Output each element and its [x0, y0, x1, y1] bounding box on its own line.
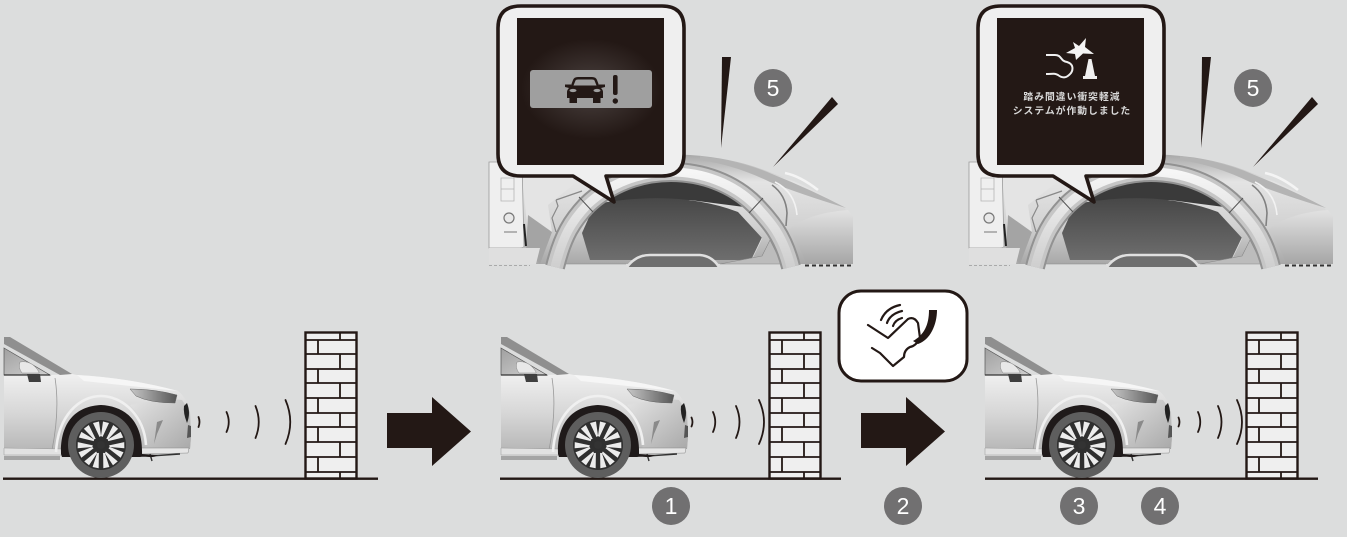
icon: traffic cone	[1083, 59, 1097, 79]
car 2	[501, 337, 688, 478]
ground line 2	[500, 478, 841, 480]
number badge 2	[884, 487, 922, 525]
number badge 3	[1060, 487, 1098, 525]
arrow: step 2 to 3	[861, 397, 945, 466]
scene 3: car braking near wall	[985, 332, 1318, 480]
brick wall 3	[1246, 332, 1298, 478]
number badge 4: 4	[1154, 493, 1167, 519]
icon: foot contour	[1046, 55, 1072, 77]
sensor waves 2	[692, 400, 764, 444]
icon: foot	[868, 318, 920, 366]
icon: vibration waves	[881, 305, 902, 326]
display screen 2	[997, 18, 1144, 165]
icon: car front	[565, 77, 605, 103]
number badge 5 right: 5	[1247, 75, 1259, 101]
dashboard 1 with warning buzzer lines	[489, 57, 853, 267]
scene 2: car with sensor detecting wall	[500, 332, 841, 480]
number badge 3: 3	[1073, 493, 1085, 519]
sensor waves 1	[198, 400, 290, 444]
car 3	[985, 337, 1172, 478]
number badge 1	[652, 487, 690, 525]
display message: 踏み間違い衝突軽減	[1023, 90, 1121, 103]
ground line 1	[3, 478, 378, 480]
brick wall 2	[769, 332, 821, 478]
display message: システムが作動しました	[1013, 104, 1131, 117]
dashboard 2 with warning buzzer lines	[969, 57, 1333, 267]
car 1	[4, 337, 191, 478]
ground line 3	[985, 478, 1318, 480]
display screen 1	[517, 18, 664, 165]
number badge 1: 1	[665, 493, 677, 519]
warning bar	[530, 70, 652, 108]
icon: pedal	[913, 310, 937, 344]
number badge 5 left	[754, 69, 792, 107]
icon: exclamation	[613, 75, 618, 104]
number badge 5 right	[1234, 69, 1272, 107]
pedal icon panel	[839, 291, 967, 381]
number badge 4	[1141, 487, 1179, 525]
number badge 5 left: 5	[767, 75, 779, 101]
speech bubble 2: system activated display	[978, 6, 1164, 202]
arrow: step 1 to 2	[387, 397, 471, 466]
icon: collision star	[1066, 38, 1094, 60]
display message	[1013, 90, 1131, 117]
number badge 2: 2	[897, 493, 909, 519]
sensor waves 3	[1178, 400, 1242, 444]
scene 1: car approaching wall with sensor waves	[3, 332, 378, 480]
speech bubble 1: forward warning display	[498, 6, 684, 202]
brick wall 1	[305, 332, 357, 478]
